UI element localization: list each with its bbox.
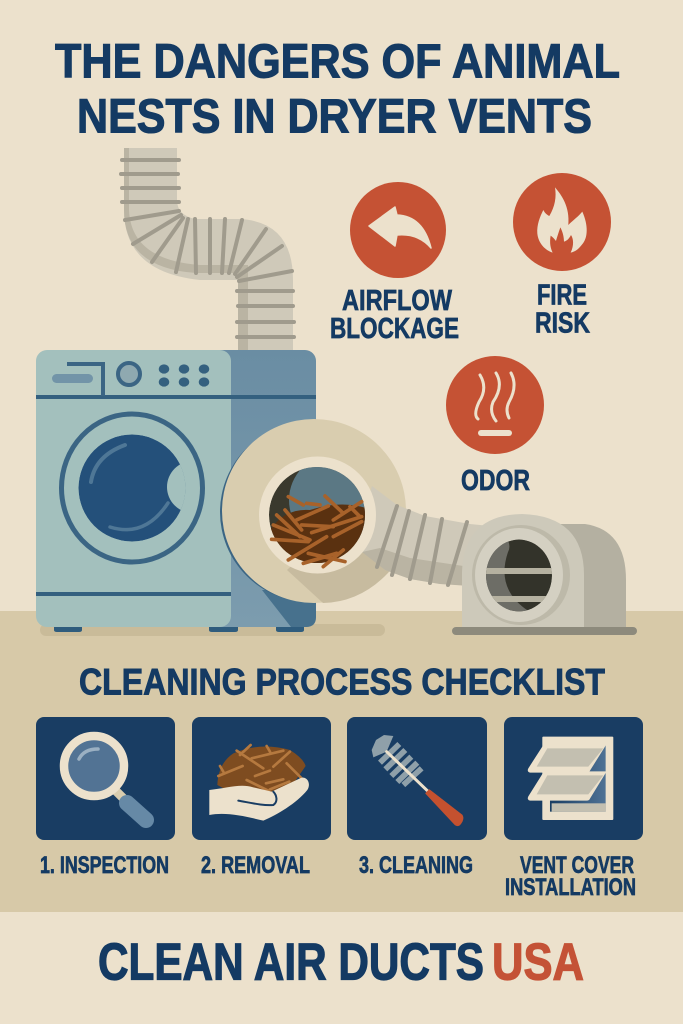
dryer machine [36, 350, 316, 632]
icon: steam [476, 373, 514, 436]
hazard: airflow blockage: BLOCKAGE [330, 313, 459, 345]
footer brand: USA [492, 934, 584, 992]
dryer floor shadow [40, 624, 385, 636]
hazard: airflow blockage: AIRFLOW [342, 285, 452, 317]
icon: back arrow [369, 207, 431, 248]
step 4: vent cover installation: VENT COVER [520, 852, 634, 879]
step 4: vent cover installation [504, 717, 643, 901]
dryer control panel [52, 363, 209, 396]
icon: magnifying glass [64, 736, 146, 820]
hazard: fire risk [513, 173, 611, 340]
hazard: airflow blockage [330, 182, 459, 345]
step 4: vent cover installation: INSTALLATION [505, 874, 636, 901]
lower flexible duct [355, 486, 490, 586]
icon: hand holding nest [209, 745, 309, 821]
roof vent hood [452, 514, 637, 635]
dryer door [62, 414, 219, 562]
step 1: inspection: 1. INSPECTION [40, 852, 169, 879]
icon: louvered vent cover [528, 737, 613, 820]
icon: bottle brush [372, 735, 463, 825]
magnified duct view with nest [220, 419, 490, 603]
hazard: odor: ODOR [461, 465, 530, 497]
step 3: cleaning: 3. CLEANING [359, 852, 473, 879]
hazard: odor [446, 356, 544, 497]
step 1: inspection [36, 717, 175, 879]
title [55, 36, 620, 144]
step 2: removal [192, 717, 331, 879]
title: THE DANGERS OF ANIMAL [55, 36, 620, 88]
hazard: fire risk: RISK [535, 308, 590, 340]
hazard: fire risk: FIRE [537, 280, 587, 312]
step 3: cleaning [347, 717, 487, 879]
nest inside duct [269, 467, 365, 569]
step 2: removal: 2. REMOVAL [201, 852, 310, 879]
checklist heading: CLEANING PROCESS CHECKLIST [79, 660, 605, 702]
flexible duct above dryer [121, 148, 294, 350]
footer brand [0, 912, 683, 1024]
title: NESTS IN DRYER VENTS [77, 90, 592, 144]
icon: flame [537, 187, 587, 253]
footer brand: CLEAN AIR DUCTS [98, 934, 484, 992]
